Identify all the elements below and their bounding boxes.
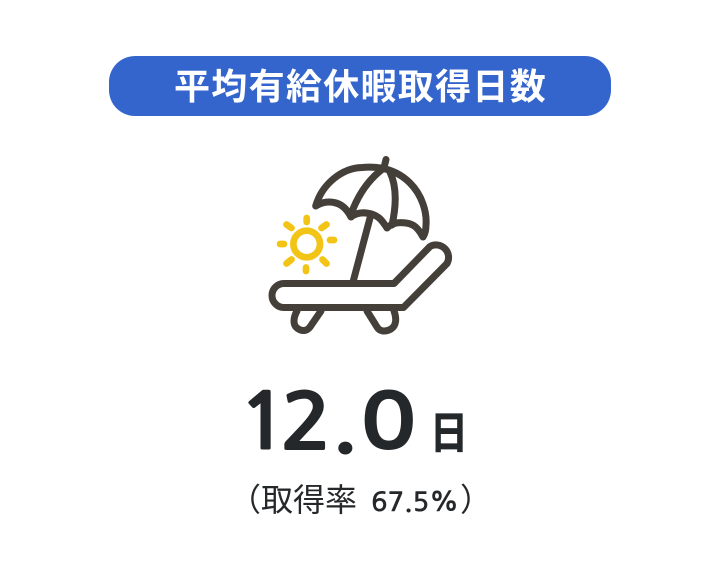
heading banner [109, 56, 611, 116]
note: acquisition rate: （取得率 [229, 482, 357, 518]
number: 2 [280, 385, 332, 461]
closing bracket: ） [460, 482, 492, 518]
heading text: 平均有給休暇取得日数 [174, 66, 547, 107]
number: 0 [360, 385, 417, 461]
icon: lounger [272, 245, 449, 331]
rate value: 67.5% [371, 489, 459, 515]
note: acquisition rate [229, 482, 492, 518]
number [238, 385, 417, 461]
unit: 日 [430, 411, 468, 459]
number: 1 [238, 385, 289, 461]
value: 12.0 days [238, 385, 468, 461]
number: . [332, 385, 358, 461]
icon: sun [280, 218, 334, 271]
icon: parasol [316, 160, 426, 282]
